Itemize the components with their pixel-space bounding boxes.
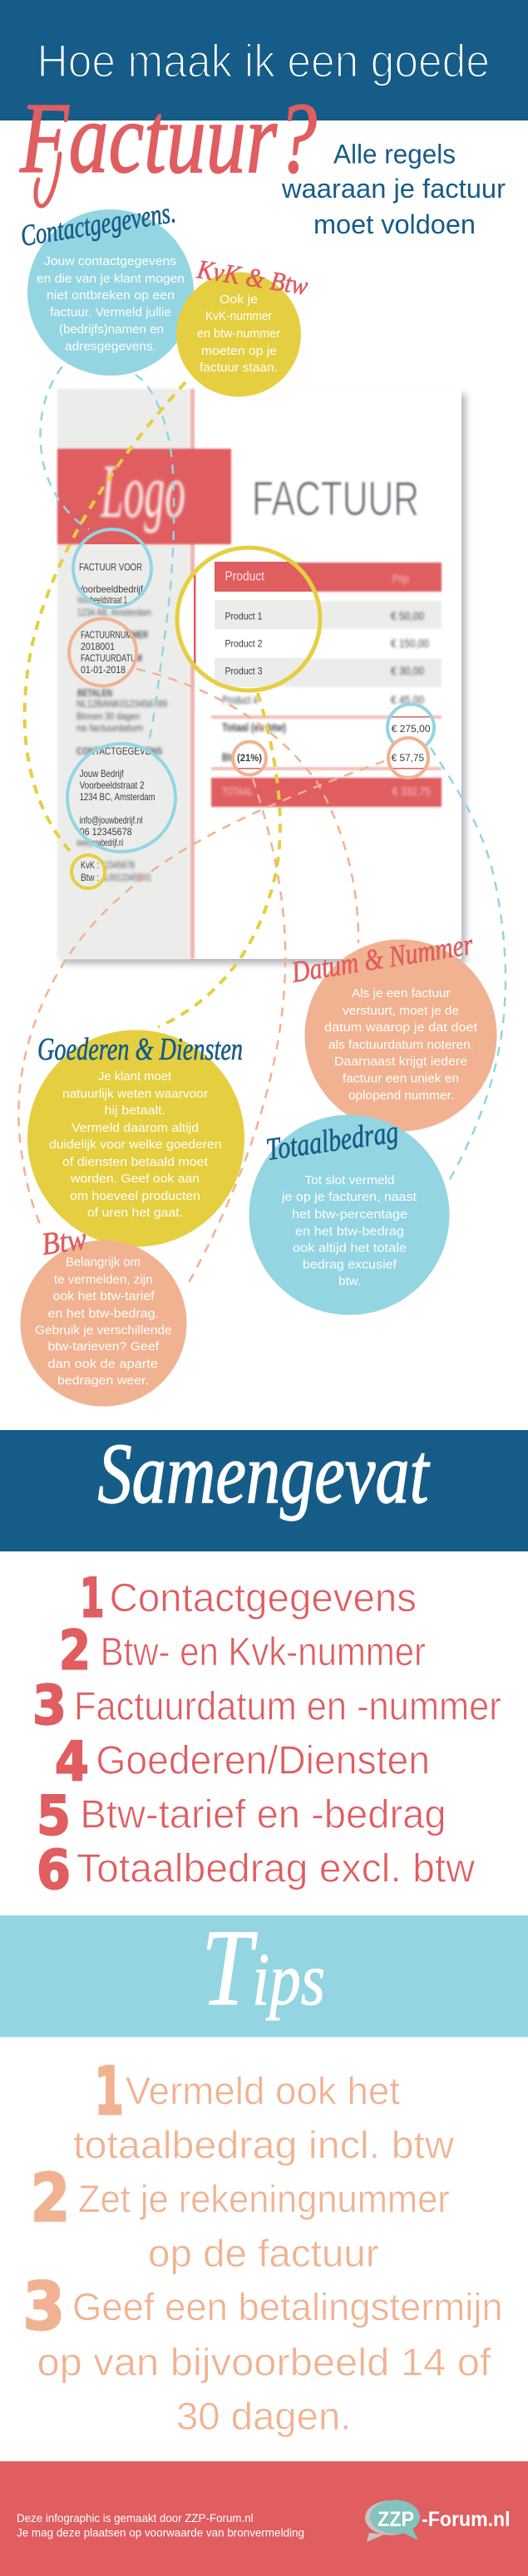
panel heading: btw: Btw xyxy=(39,1222,89,1262)
icon: ZZP-Forum logo: -Forum.nl xyxy=(422,2508,511,2531)
footer credit text: Je mag deze plaatsen op voorwaarde van bronvermelding xyxy=(17,2526,304,2539)
panel: btw: te vermelden, zijn xyxy=(54,1273,153,1286)
magnifier: producten: Product 3 xyxy=(225,665,263,676)
magnifier: factuurnummer en datum: FACTUURNUMMER xyxy=(81,629,148,641)
panel: totaalbedrag: het btw-percentage xyxy=(292,1207,407,1222)
panel heading: contactgegevens: Contactgegevens. xyxy=(18,195,178,253)
panel heading: kvk en btw: KvK & Btw xyxy=(195,253,310,301)
subtitle: Alle regels xyxy=(333,140,456,170)
panel heading: goederen en diensten: Goederen & Diensten xyxy=(37,1032,243,1067)
blurred table text: Product 4 xyxy=(222,693,258,706)
panel: datum en nummer: verstuurt, moet je de xyxy=(343,1004,459,1018)
panel: kvk en btw: en btw-nummer xyxy=(197,327,280,341)
panel: btw: dan ook de aparte xyxy=(48,1357,158,1371)
item 6 xyxy=(37,1840,475,1901)
magnifier: btw-bedrag: € 57,75 xyxy=(392,752,424,764)
panel: totaalbedrag: en het btw-bedrag xyxy=(295,1224,404,1238)
item 3: 3 xyxy=(32,1675,67,1737)
tips band xyxy=(0,1915,528,2038)
logo block xyxy=(57,449,231,544)
subtitle xyxy=(281,140,506,239)
connector: contact bubble to own details xyxy=(136,375,174,745)
panel: goederen en diensten: of uren het gaat. xyxy=(87,1206,183,1220)
panel: goederen en diensten: hij betaalt. xyxy=(105,1104,165,1118)
magnifier: factuur voor: FACTUUR VOOR xyxy=(79,561,142,573)
panel: kvk en btw: moeten op je xyxy=(201,344,277,358)
blurred table text xyxy=(222,572,431,798)
panel: contactgegevens xyxy=(27,209,194,376)
item 6: Totaalbedrag excl. btw xyxy=(76,1847,475,1891)
panel: contactgegevens: factuur. Vermeld jullie xyxy=(50,306,171,320)
magnifier: factuurnummer en datum: 01-01-2018 xyxy=(81,664,126,676)
left grey column xyxy=(57,389,190,959)
blurred left column text: na factuurdatum xyxy=(76,722,143,734)
panel: btw xyxy=(20,1240,186,1406)
panel: datum en nummer: Daarnaast krijgt iedere xyxy=(334,1054,467,1069)
blurred left column text: Binnen 30 dagen xyxy=(76,710,140,722)
blurred left column text: Voorbeeldbedrijf xyxy=(77,583,144,595)
panel: kvk en btw: factuur staan. xyxy=(200,361,278,375)
panel: btw: Belangrijk om xyxy=(66,1255,141,1270)
panel: kvk en btw: Ook je xyxy=(220,293,258,307)
magnifier: producten: Product 2 xyxy=(225,638,263,650)
magnifier: eigen contactgegevens: 06 12345678 xyxy=(80,826,132,838)
magnifier: factuur voor: Voorbeeldbedrijf xyxy=(77,583,144,595)
item 5: 5 xyxy=(37,1786,71,1848)
blurred table text: € 332,75 xyxy=(392,784,431,798)
invoice document mockup xyxy=(57,389,466,964)
blurred left column text: NL12BANK0123456789 xyxy=(76,698,167,710)
panel: goederen en diensten: of diensten betaald moet xyxy=(62,1155,209,1169)
panel: goederen en diensten: om hoeveel producten xyxy=(70,1189,200,1203)
blurred table text: TOTAAL xyxy=(222,784,253,798)
magnifier: btw-percentage xyxy=(231,740,268,776)
tip 3: 3 xyxy=(23,2269,65,2345)
connector: total to total bubble xyxy=(431,748,506,1185)
magnifier: kvk en btw: KvK : xyxy=(81,859,99,871)
magnifier: factuur voor: Voorbeeldstraat 1 xyxy=(77,594,127,606)
blurred left column text: 1234 AB, Amsterdam xyxy=(77,607,151,618)
panel: goederen en diensten xyxy=(27,1030,244,1246)
item 6: 6 xyxy=(37,1840,71,1901)
magnifier: eigen contactgegevens xyxy=(65,742,178,855)
panel: totaalbedrag: Tot slot vermeld xyxy=(304,1173,394,1187)
tip 1: 1 xyxy=(94,2053,124,2130)
panel: totaalbedrag: bedrag excusief xyxy=(303,1258,397,1272)
panel: btw: Gebruik je verschillende xyxy=(35,1324,172,1338)
panel: datum en nummer: datum waarop je dat doet xyxy=(324,1020,478,1035)
header band xyxy=(0,0,528,120)
blurred table text: € 45,00 xyxy=(391,693,424,706)
tip 2: 2 xyxy=(31,2161,70,2237)
tip 3: 30 dagen. xyxy=(176,2395,351,2438)
item 4: 4 xyxy=(55,1731,89,1793)
blurred left column text: FACTUURDATUM xyxy=(81,652,142,664)
panel: kvk en btw: KvK-nummer xyxy=(205,309,272,323)
panel: goederen en diensten: Vermeld daarom altijd xyxy=(72,1121,199,1135)
tip 2: op de factuur xyxy=(148,2232,379,2275)
invoice word: FACTUUR xyxy=(252,472,419,526)
connector: vat amount to btw bubble xyxy=(18,761,384,1230)
blurred left column text: FACTUURNUMMER xyxy=(81,629,148,641)
item 5: Btw-tarief en -bedrag xyxy=(80,1793,447,1836)
magnifier: eigen contactgegevens: CONTACTGEGEVENS xyxy=(76,745,162,757)
summary heading: Samengevat xyxy=(98,1426,430,1522)
footer credit text xyxy=(17,2511,304,2539)
panel: datum en nummer: als factuurdatum noteren. xyxy=(328,1038,474,1052)
blurred left column text: Voorbeeldstraat 1 xyxy=(77,594,127,606)
magnifier: eigen contactgegevens: info@jouwbedrijf.nl xyxy=(80,814,143,826)
panel: contactgegevens: niet ontbreken op een xyxy=(47,288,175,302)
magnifier: factuurnummer en datum: FACTUURDATUM xyxy=(81,652,142,664)
item 2: 2 xyxy=(59,1620,91,1683)
item 2 xyxy=(59,1620,426,1683)
magnifier: factuurnummer en datum: 2018001 xyxy=(81,641,115,652)
connector: vat percentage to btw bubble xyxy=(187,779,285,1286)
blurred table text: € 50,00 xyxy=(391,609,424,622)
panel: datum en nummer xyxy=(304,939,497,1132)
tip 3 xyxy=(23,2269,503,2438)
blurred table text: Prijs xyxy=(392,572,409,585)
panel: datum en nummer: factuur een uniek en xyxy=(343,1072,459,1085)
item 4 xyxy=(55,1731,430,1793)
table blurred rows xyxy=(215,563,442,592)
magnifier: btw-bedrag xyxy=(387,736,430,779)
panel: contactgegevens: adresgegevens. xyxy=(65,340,156,354)
tip 3: Geef een betalingstermijn xyxy=(72,2285,503,2328)
tip 2: Zet je rekeningnummer xyxy=(78,2177,450,2220)
blurred table text: € 30,00 xyxy=(391,664,424,677)
tip 1: Vermeld ook het xyxy=(126,2069,400,2112)
panel: contactgegevens: en die van je klant mogen xyxy=(37,272,185,286)
panel: goederen en diensten: duidelijk voor welke goederen xyxy=(49,1138,221,1152)
blurred left column text: CONTACTGEGEVENS xyxy=(76,745,162,757)
magnifier: eigen contactgegevens: 1234 BC, Amsterdam xyxy=(80,791,155,803)
title: first line: Hoe maak ik een goede xyxy=(37,35,490,87)
tip 1 xyxy=(73,2053,455,2166)
panel: totaalbedrag: btw. xyxy=(338,1275,361,1289)
panel: datum en nummer: oplopend nummer. xyxy=(348,1089,454,1103)
panel: btw: bedragen weer. xyxy=(57,1374,149,1388)
footer credit text: Deze infographic is gemaakt door ZZP-Forum.nl xyxy=(17,2511,254,2524)
panel heading: totaalbedrag: Totaalbedrag xyxy=(264,1114,401,1168)
panel: kvk en btw xyxy=(176,273,301,397)
subtitle: waaraan je factuur xyxy=(281,174,506,204)
item 3 xyxy=(32,1675,501,1737)
title: Factuur script word: Factuur? xyxy=(19,82,317,194)
panel: goederen en diensten: worden. Geef ook aan xyxy=(70,1172,200,1186)
connector: products to goods bubble xyxy=(158,693,280,1027)
item 4: Goederen/Diensten xyxy=(96,1738,430,1783)
panel: totaalbedrag: je op je facturen, naast xyxy=(281,1190,417,1204)
tips heading: Tips xyxy=(201,1906,325,2028)
item 1 xyxy=(80,1568,417,1630)
panel: contactgegevens: Jouw contactgegevens xyxy=(44,254,176,268)
magnifier: totaalbedrag: € 275,00 xyxy=(392,723,431,735)
item 2: Btw- en Kvk-nummer xyxy=(101,1630,426,1674)
magnifier: totaalbedrag xyxy=(386,703,436,746)
magnifier: producten xyxy=(175,544,331,694)
summary list xyxy=(32,1568,501,1901)
footer band xyxy=(0,2461,528,2576)
icon: ZZP-Forum logo: ZZP xyxy=(377,2508,414,2531)
magnifier: producten: Product 1 xyxy=(225,611,263,622)
blurred left column text: Btw : NL0012345B01 xyxy=(81,872,151,883)
panel: goederen en diensten: natuurlijk weten waarvoor xyxy=(62,1087,208,1101)
panel: goederen en diensten: Je klant moet xyxy=(98,1069,172,1084)
tip 3: op van bijvoorbeeld 14 of xyxy=(37,2341,491,2384)
logo word: Logo xyxy=(100,449,185,533)
magnifier: kvk en btw xyxy=(70,853,106,890)
magnifier: eigen contactgegevens: www.jouwbedrijf.nl xyxy=(76,837,123,848)
panel: btw: btw-tarieven? Geef xyxy=(48,1340,160,1354)
document shadow xyxy=(63,394,466,964)
item 1: Contactgegevens xyxy=(110,1576,417,1620)
panel: contactgegevens: (bedrijfs)namen en xyxy=(59,322,164,337)
blurred left column text: BETALEN xyxy=(77,687,112,699)
panel: totaalbedrag xyxy=(249,1115,449,1315)
connector: contact bubble to client details xyxy=(40,366,89,529)
magnifier: factuurnummer en datum xyxy=(67,617,138,688)
item 5 xyxy=(37,1786,447,1848)
blurred left column text xyxy=(76,583,167,883)
blurred table text: Totaal (ex btw) xyxy=(222,720,286,734)
summary band xyxy=(0,1430,528,1551)
tips list xyxy=(23,2053,503,2438)
subtitle: moet voldoen xyxy=(313,209,476,239)
blurred left column text: www.jouwbedrijf.nl xyxy=(76,837,123,848)
panel heading: datum en nummer: Datum & Nummer xyxy=(289,927,476,989)
panel: totaalbedrag: ook altijd het totale xyxy=(293,1241,407,1255)
magnifier: kvk en btw: Btw : xyxy=(81,872,99,883)
connector: date to date bubble xyxy=(136,669,358,943)
panel: btw: ook het btw-tarief xyxy=(53,1290,155,1303)
blurred table text: € 150,00 xyxy=(391,637,429,650)
panel: btw: en het btw-bedrag. xyxy=(48,1306,159,1321)
blurred left column text: KvK : 12345678 xyxy=(81,859,135,871)
magnifier: factuur voor xyxy=(71,528,154,611)
panel: datum en nummer: Als je een factuur xyxy=(352,986,451,1000)
magnifier: producten: Product xyxy=(225,570,264,584)
connector: kvk bubble to kvk number xyxy=(25,382,185,856)
icon: ZZP-Forum logo xyxy=(365,2500,511,2542)
magnifier: eigen contactgegevens: Jouw Bedrijf xyxy=(80,768,124,779)
magnifier: eigen contactgegevens: Voorbeeldstraat 2 xyxy=(80,779,145,791)
blurred table text: Btw xyxy=(222,750,237,764)
tip 1: totaalbedrag incl. btw xyxy=(73,2123,455,2166)
tip 2 xyxy=(31,2161,450,2275)
item 1: 1 xyxy=(80,1568,105,1630)
magnifier: btw-percentage: (21%) xyxy=(237,752,262,764)
